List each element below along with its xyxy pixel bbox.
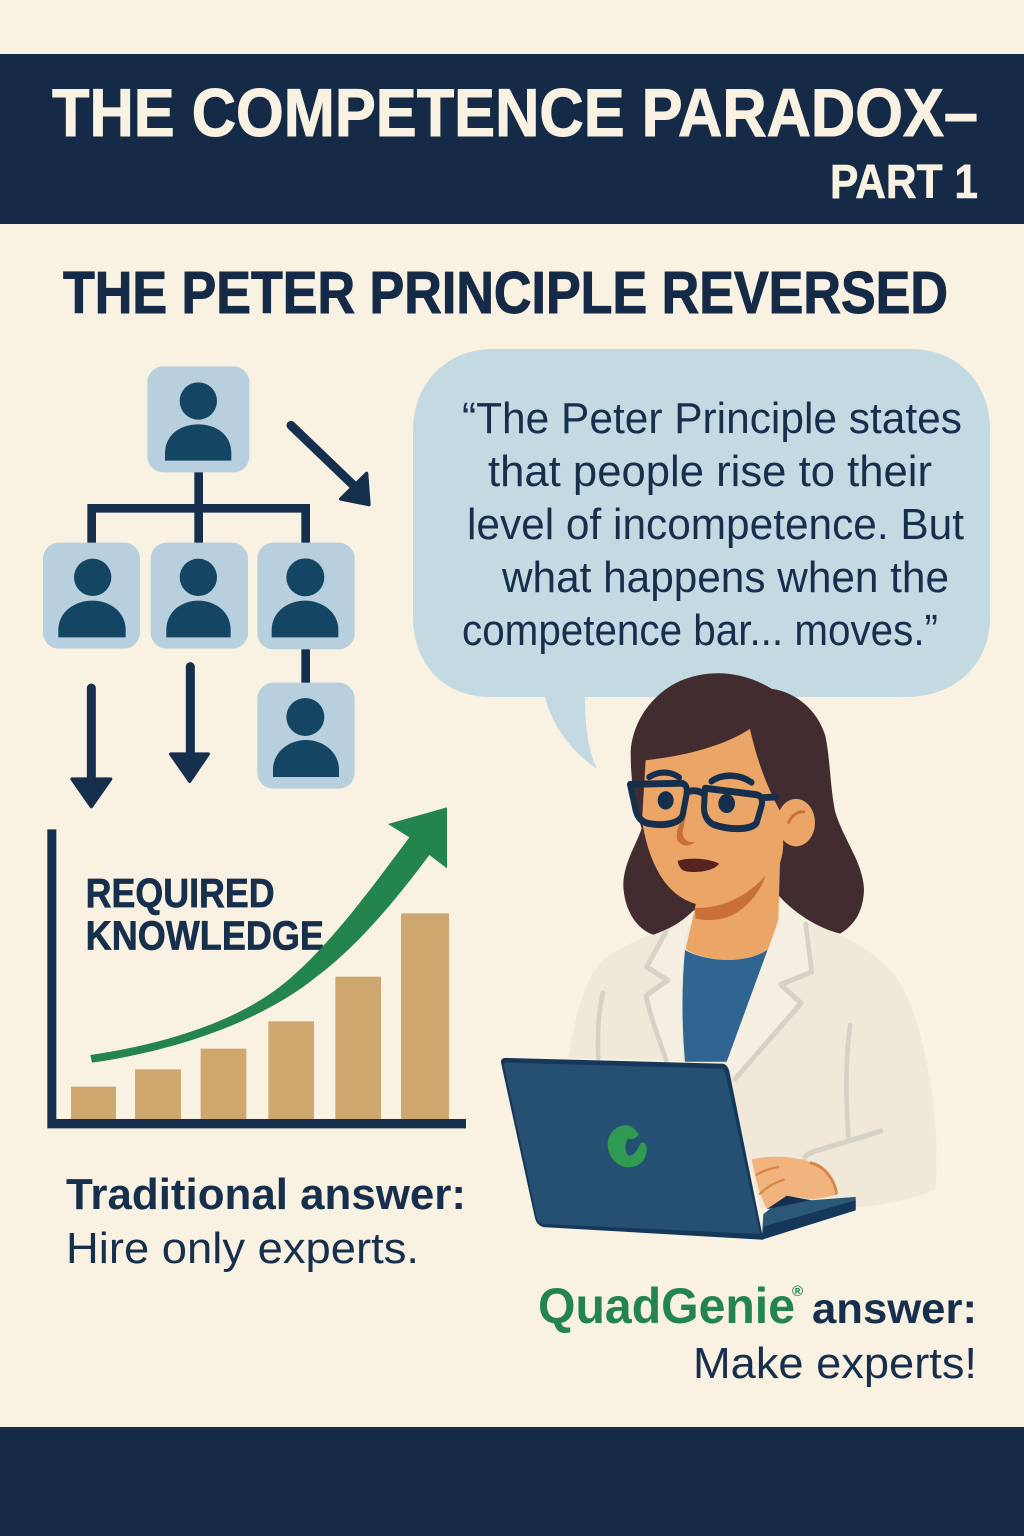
laptop logo xyxy=(608,1125,647,1167)
facial details xyxy=(649,773,752,872)
laptop xyxy=(501,1058,856,1240)
quote text: level of incompetence. But xyxy=(467,500,964,549)
arrow: down middle xyxy=(171,667,208,781)
lid xyxy=(501,1058,763,1240)
QuadGenie answer text: Make experts! xyxy=(693,1339,977,1388)
quote text: that people rise to their xyxy=(488,447,932,496)
arrow: down left xyxy=(72,688,111,807)
org chart xyxy=(43,366,369,807)
quote text: what happens when the xyxy=(501,553,949,602)
header band xyxy=(0,54,1024,224)
neck shadow xyxy=(695,875,766,920)
fingers xyxy=(767,1196,810,1209)
arrow: diagonal xyxy=(291,425,369,505)
traditional answer text: Hire only experts. xyxy=(66,1224,419,1273)
axes xyxy=(47,829,466,1128)
hair xyxy=(623,673,864,935)
title part label: PART 1 xyxy=(830,156,978,209)
traditional answer text: Traditional answer: xyxy=(66,1170,466,1219)
chart label xyxy=(86,870,324,959)
chart label: KNOWLEDGE xyxy=(86,913,324,959)
person card: top xyxy=(147,366,249,472)
speech bubble xyxy=(413,349,990,769)
QuadGenie answer text xyxy=(538,1278,977,1388)
person card: bottom xyxy=(257,683,355,789)
coat lapel right xyxy=(727,901,813,1081)
growth arrow xyxy=(90,807,447,1063)
connectors xyxy=(92,470,306,685)
coat lines xyxy=(598,924,881,1161)
person card: right xyxy=(257,543,355,649)
ear xyxy=(777,799,815,846)
QuadGenie answer text: answer: xyxy=(812,1285,977,1333)
quote text: competence bar... moves.” xyxy=(462,606,938,655)
lab coat xyxy=(568,924,937,1208)
coat collar xyxy=(645,911,695,1062)
chart label: REQUIRED xyxy=(86,870,275,916)
person card: middle xyxy=(151,543,248,649)
footer band xyxy=(0,1427,1024,1536)
hand xyxy=(752,1157,837,1209)
quote text xyxy=(462,394,964,655)
QuadGenie answer text: QuadGenie xyxy=(538,1278,795,1334)
QuadGenie answer text: ® xyxy=(792,1283,803,1300)
bar chart xyxy=(47,807,466,1128)
person card: left xyxy=(43,543,140,649)
blue shirt xyxy=(682,950,768,1062)
illustration: woman with laptop xyxy=(501,673,937,1240)
keyboard base xyxy=(762,1196,856,1240)
face xyxy=(642,729,783,905)
neck xyxy=(686,840,781,960)
traditional answer text xyxy=(66,1170,466,1273)
quote text: “The Peter Principle states xyxy=(462,394,962,443)
glasses xyxy=(630,783,776,829)
bars xyxy=(71,913,449,1120)
